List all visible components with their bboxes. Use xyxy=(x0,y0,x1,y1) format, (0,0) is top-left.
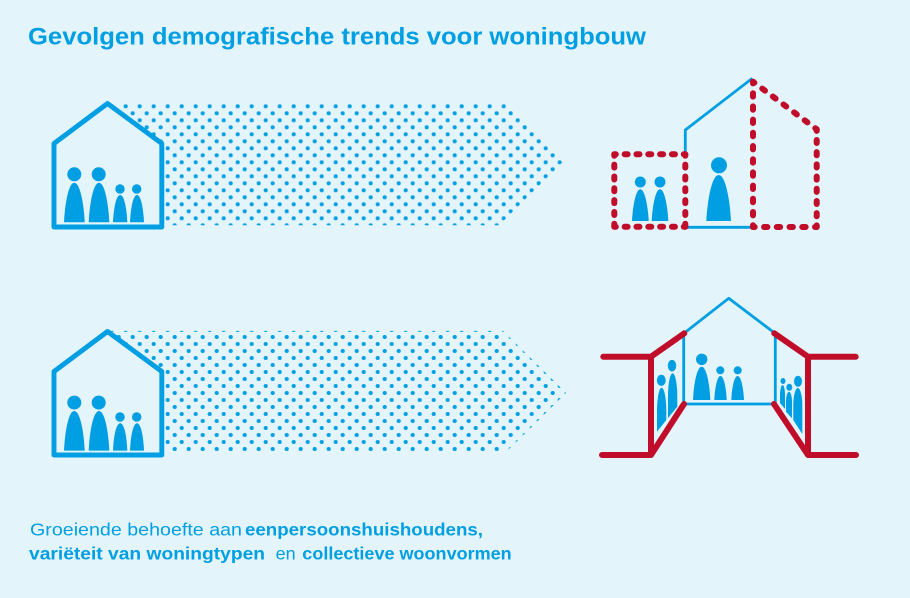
blue outline xyxy=(684,298,775,404)
caption: Groeiende behoefte aan xyxy=(30,520,242,540)
person: single resident xyxy=(706,157,731,221)
dotted arrow: top xyxy=(123,104,562,225)
caption: en xyxy=(276,543,296,563)
people: left wing xyxy=(657,360,677,432)
caption xyxy=(29,520,512,563)
people: top left family xyxy=(64,167,144,222)
house: top left family xyxy=(54,104,162,227)
house: bottom left family xyxy=(54,332,162,455)
house: bottom right collective housing xyxy=(602,298,856,455)
title: Gevolgen demografische trends voor woningbouw xyxy=(28,24,646,50)
blue outline xyxy=(685,78,753,227)
red dashed unit xyxy=(614,154,685,227)
red walls: right xyxy=(774,333,856,455)
red dashed extension xyxy=(753,82,817,227)
house: top right split into smaller units xyxy=(614,78,817,227)
people: bottom left family xyxy=(64,396,144,451)
caption: variëteit van woningtypen xyxy=(29,543,265,563)
people: centre xyxy=(693,354,744,400)
caption: eenpersoonshuishoudens, xyxy=(245,520,483,540)
dotted arrow: bottom xyxy=(108,331,566,451)
red walls: left xyxy=(602,333,684,455)
people: pair in small unit xyxy=(632,176,668,221)
people: right wing xyxy=(780,376,802,434)
caption: collectieve woonvormen xyxy=(302,543,512,563)
